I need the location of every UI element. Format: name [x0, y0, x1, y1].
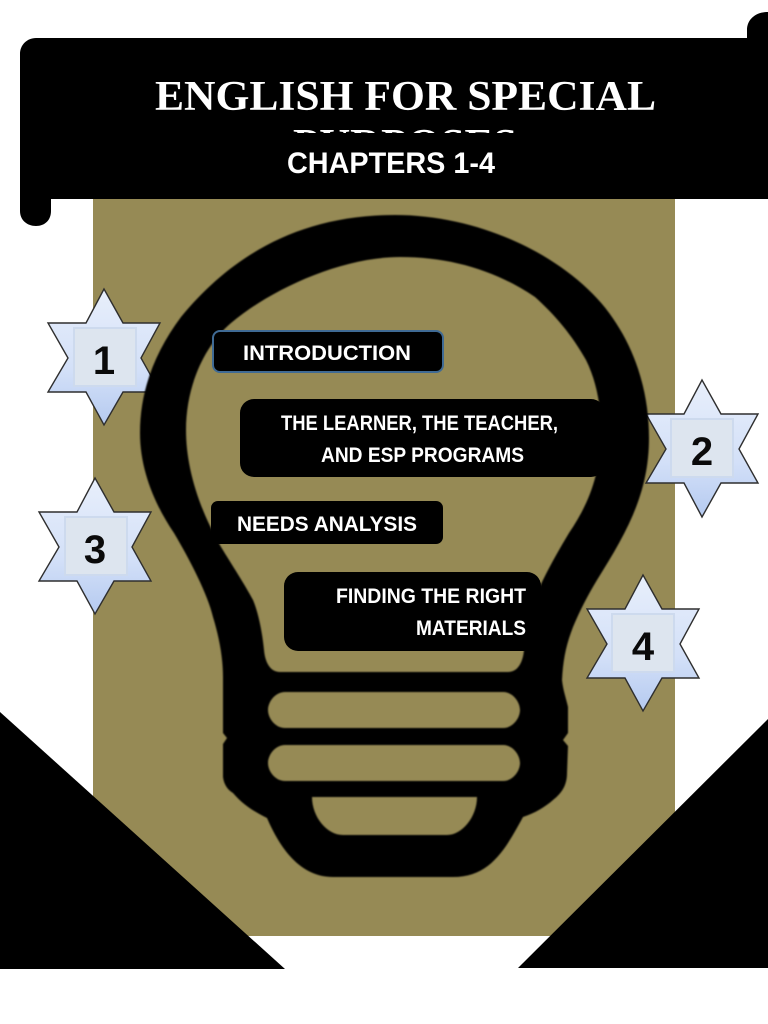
chapter box: learner, teacher, programs — [240, 399, 605, 477]
chapter box: needs analysis: NEEDS ANALYSIS — [237, 513, 417, 536]
chapter box: introduction: INTRODUCTION — [243, 342, 411, 365]
banner scroll shape — [20, 12, 768, 226]
chapter box: introduction — [213, 331, 443, 372]
icon: light bulb outline — [140, 215, 649, 877]
subtitle: CHAPTERS 1-4 — [287, 147, 495, 180]
chapter box: finding the right materials: MATERIALS — [416, 617, 526, 640]
title: ENGLISH FOR SPECIAL — [155, 74, 656, 120]
right corner triangle — [518, 719, 768, 968]
star badge 1: 1 — [93, 339, 115, 383]
star badge 3 — [39, 478, 151, 614]
star badge 4 — [587, 575, 699, 711]
left corner triangle — [0, 712, 285, 969]
chapter box: finding the right materials: FINDING THE RIGHT — [336, 585, 526, 608]
title banner — [20, 12, 768, 226]
chapter box: learner, teacher, programs: THE LEARNER, THE TEACHER, — [281, 412, 558, 435]
star badge 4: 4 — [632, 625, 655, 669]
star badge 2: 2 — [691, 430, 713, 474]
chapter box: finding the right materials — [284, 572, 541, 651]
star badge 2 — [646, 380, 758, 517]
star badge 3: 3 — [84, 528, 106, 572]
title — [156, 82, 654, 133]
star badge 1 — [48, 289, 160, 425]
chapter box: needs analysis — [211, 501, 443, 544]
title: PURPOSES — [293, 122, 517, 168]
gold background panel — [93, 199, 675, 936]
chapter box: learner, teacher, programs: AND ESP PROGRAMS — [321, 444, 524, 467]
